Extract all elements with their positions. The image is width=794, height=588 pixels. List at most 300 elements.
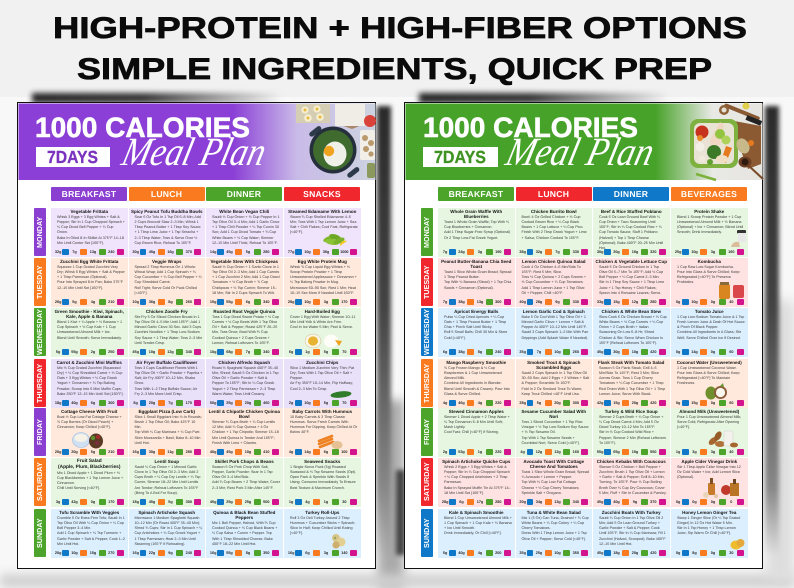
meal: Whole Grain Waffle With Blueberries: Add 1 Tbsp Sugar-Free Syrup (Optional) Or 2 Tbsp Low-Fat Greek Yogurt. xyxy=(444,230,510,240)
title: SIMPLE INGREDIENTS, QUICK PREP xyxy=(77,53,712,86)
meal: Skillet Pork Chops & Beans: Add ¾ Cup Beans + 2 Tbsp Water; Cover 2–3 Min; Rest Pork 3 Min After 145°F. xyxy=(212,480,280,490)
meal: Kombucha: 1 Cup Raw Low-Sugar Kombucha. xyxy=(677,265,734,269)
meal: Roasted Root Veggie Quinoa: Toss 1 Cup Diced Sweet Potato + ½ Cup Carrots + ½ Cup Beets With 1 Tsp Olive Oil + Salt & Pepper; Roast 425°F 20–25 Min, Toss Once; Bowl With ⅔ Cup Cooked Quinoa + 2 Cups Greens + Lemon; Reheat Leftovers To 165°F. xyxy=(212,315,279,345)
meal: Tomato Juice: 14g xyxy=(691,350,698,354)
meal: Hard-Boiled Egg: Cover 1 Egg With Water; Simmer 10–11 Min Until Yolk & White Are Firm. xyxy=(290,315,355,324)
meal: Vegetable Stew With Chickpeas: Vegetable Stew With Chickpeas xyxy=(210,259,278,264)
meal: Steamed Edamame With Lemon: 77g xyxy=(288,250,294,254)
meal: Hard-Boiled Egg: 1g xyxy=(305,350,310,354)
meal: Sesame Cucumber Salad With Nori: Top With 1 Tsp Sesame Seeds + Crumbled Nori; Serve Cold [<40°F]. xyxy=(522,436,580,445)
meal: Egg White Protein Mug: Egg White Protein Mug xyxy=(298,259,347,264)
meal: Steamed Edamame With Lemon: Steam ¾ Cup Shelled Edamame 4–5 Min; Toss With 1 Tsp Lemon Juice + Sea Salt + Chili Flakes; Cool Fast; Refrigerate [<40°F]. xyxy=(290,215,358,234)
meal: Turkey Roll-Ups: 6g xyxy=(305,551,310,555)
meal: Chicken Burrito Bowl: Bowl: 4 Oz Grilled Chicken + ½ Cup Cooked Brown Rice + ¼ Cup Black Beans + 1 Cup Lettuce + ¼ Cup Pico. xyxy=(522,215,583,229)
meal: Zucchini Chips xyxy=(284,359,360,408)
meal: Stewed Cinnamon Apples: 53g xyxy=(458,450,465,454)
meal: Tofu Scramble With Veggies: 20g xyxy=(55,551,61,555)
day tab: friday xyxy=(34,408,46,456)
meal: Stewed Cinnamon Apples: 2g xyxy=(443,450,447,454)
meal: Flank Steak With Tomato Salad: 42g xyxy=(597,401,603,405)
meal: Zucchini Boats With Turkey: Zucchini Boats With Turkey xyxy=(602,510,661,515)
meal: Turkey & Wild Rice Soup: Stir In ½ Cup Cooked Wild Rice + Pepper; Simmer 2 Min (Reheat Leftovers To 165°F). xyxy=(599,430,666,445)
meal: White Bean Vegan Chili: 280 xyxy=(263,250,269,254)
column header: beverages xyxy=(671,187,747,201)
meal: Zucchini Chips: Air Fry 350°F 10–14 Min, Flip Halfway; Cool 2–3 Min To Crisp. xyxy=(290,381,353,391)
meal: Smoked Trout & Spinach Scrambled Eggs: Sauté 2 Cups Spinach In 1 Tsp Olive Oil 30–60 Sec; Add 2 Eggs + 2 Whites + Salt & Pepper; Scramble To 160°F. xyxy=(522,371,589,385)
meal: Fruit Salad: Fruit Salad xyxy=(77,459,102,464)
meal: Lentil Soup: 5g xyxy=(168,500,173,504)
day tab: saturday: SATURDAY xyxy=(35,463,44,501)
meal: Sesame Cucumber Salad With Nori xyxy=(516,408,592,457)
meal: Egg White Protein Mug: Whisk ¾ Cup Liquid Egg Whites + ½ Scoop Protein Powder + 1 Tbsp Unsweetened Applesauce + Cinnamon + ¼ Tsp Baking Powder In Mug. xyxy=(290,265,357,284)
meal: Chicken & Vegetable Lettuce Cup: 15g xyxy=(613,300,620,304)
meal: Lemon Chicken Quinoa Salad: 330 xyxy=(573,300,579,304)
meal: Zucchini Boats With Turkey xyxy=(593,509,670,558)
meal: Beef & Rice Stuffed Poblano: 16g xyxy=(632,250,638,254)
meal: Zucchini Egg White Frittata: 26g xyxy=(55,300,61,304)
column header: lunch xyxy=(128,187,204,201)
meal: Lemon Garlic Cod & Spinach xyxy=(516,308,592,357)
meal: Carrot & Zucchini Mini Muffins: 6g xyxy=(91,401,95,405)
meal: Chicken Alfredo Squash: Chicken Alfredo Squash xyxy=(218,360,270,365)
meal: Vegetable Stew With Chickpeas: 6g xyxy=(246,300,250,304)
meal: Apricot Energy Balls: Roll 5 Small Balls; Chill 30 Min & Store Cold [<40°F]. xyxy=(444,330,507,340)
meal: Peanut Butter-Banana Chia Seed Toast: 13g xyxy=(477,300,483,304)
meal: Apple Cider Vinegar Drink: 0g xyxy=(676,500,680,504)
day tab: friday: FRIDAY xyxy=(35,419,44,445)
meal: Air Fryer Buffalo Cauliflower: 8g xyxy=(133,401,138,405)
meal: Whole Grain Waffle With Blueberries: 3g xyxy=(478,250,482,254)
meal: Apricot Energy Balls: 8g xyxy=(478,350,482,354)
day tab: saturday xyxy=(421,458,433,506)
meal: Lentil & Chipotle Chicken Quinoa Bowl: Simmer ¾ Cups Broth + ¼ Cup Lentils 12 Min; Add ¼ Cup Quinoa + 4 Oz Chicken + 1 Tsp Chipotle; Simmer 15–18 Min Until Quinoa Is Tender And 165°F; Finish With Lime + Cilantro. xyxy=(212,420,279,445)
meal: Apple Cider Vinegar Drink: Stir 1 Tbsp Apple Cider Vinegar Into 12 Oz Cold Water + Ice; Add Lemon Slice (Optional). xyxy=(677,465,741,479)
meal: Tomato Juice: Combine All Ingredients In A Glass; Stir Well; Serve Chilled Over Ice If Desired. xyxy=(677,330,741,340)
meal: Sesame Cucumber Salad With Nori: 12g xyxy=(554,450,561,454)
badge: 7 days: 7DAYS xyxy=(434,147,486,167)
icon: carrots and hummus xyxy=(318,434,342,449)
meal: Apricot Energy Balls: 240 xyxy=(495,350,501,354)
meal: Spinach Artichoke Quiche Cups xyxy=(438,458,514,507)
header banner: purple xyxy=(18,104,376,180)
meal: Lentil Soup: 300 xyxy=(186,500,192,504)
meal: Zucchini Egg White Frittata: 4g xyxy=(91,300,95,304)
meal: Almond Milk: 1g xyxy=(676,450,680,454)
meal: Honey Lemon Ginger Tea: 0g xyxy=(711,551,715,555)
meal: Smoked Trout & Spinach Scrambled Eggs: 5g xyxy=(537,401,541,405)
meal: Seaweed Snacks xyxy=(284,458,360,507)
day tab: sunday: SUNDAY xyxy=(422,518,431,548)
meal: Beef & Rice Stuffed Poblano: 30g xyxy=(597,250,603,254)
icon: ginger snack xyxy=(332,534,346,549)
meal: Lemon Chicken Quinoa Salad: Toss ½ Cup Quinoa + 2 Cups Greens + ½ Cup Cucumber + ¼ Cup Tomatoes; Add 1 Tbsp Lemon Juice + 1 Tsp Olive Oil + Pepper; Chill <40°F. xyxy=(522,275,586,295)
meal: Spinach Artichoke Squash xyxy=(128,509,205,558)
meal: Turkey Roll-Ups: 3g xyxy=(324,551,328,555)
meal: Chicken & Vegetable Lettuce Cup: 33g xyxy=(597,300,603,304)
column header: dinner xyxy=(593,187,669,201)
meal: Turkey & Wild Rice Soup: 15g xyxy=(632,450,638,454)
meal: Vegetable Frittata xyxy=(51,208,128,257)
meal: Coconut Water: 15g xyxy=(691,401,698,405)
meal: Turkey & Wild Rice Soup: 65g xyxy=(613,450,620,454)
meal: Chicken Burrito Bowl: 38g xyxy=(519,250,526,254)
meal: Tofu Scramble With Veggies: Add 1 Cup Spinach + ¼ Tsp Turmeric + Garlic Powder + Salt & Pepper; Cook 1–2 Min Until Hot. xyxy=(57,531,125,546)
meal: Spinach Artichoke Quiche Cups: 17g xyxy=(477,500,483,504)
meal: Tofu Scramble With Veggies xyxy=(51,509,128,558)
meal: Chicken Alfredo Squash: 460 xyxy=(263,401,269,405)
meal: Skillet Pork Chops & Beans: Season 5 Oz Pork Chop With Salt, Pepper, Garlic Powder; Sear In 1 Tsp Olive Oil 3–4 Min/Side. xyxy=(212,465,273,479)
meal: Chicken & Vegetable Lettuce Cup: Sauté 5 Oz Ground Chicken In 1 Tsp Olive Oil 5–7 Min To 165°F; Add ½ Cup Bell Pepper + ¼ Cup Carrot 2–3 Min. xyxy=(599,265,663,279)
meal: Veggie Wraps: 36g xyxy=(149,300,155,304)
meal: Kale & Spinach Smoothie: Blend 1 Cup Unsweetened Almond Milk + 1 Cup Spinach + 1 Cup Kale + ½ Banana + Ice Until Smooth. xyxy=(444,516,512,530)
meal: Air Fryer Buffalo Cauliflower: 170 xyxy=(186,401,192,405)
meal: Lemon Chicken Quinoa Salad: 28g xyxy=(536,300,542,304)
meal: Tuna & White Bean Salad: 35g xyxy=(519,551,526,555)
meal: Cottage Cheese With Fruit: 210 xyxy=(108,450,114,454)
meal: Kale & Spinach Smoothie: 40g xyxy=(458,551,465,555)
meal: Smoked Trout & Spinach Scrambled Eggs: Smoked Trout & Spinach Scrambled Eggs xyxy=(527,360,580,370)
meal: Apricot Energy Balls: Apricot Energy Balls xyxy=(454,309,498,314)
meal: Beef & Rice Stuffed Poblano: 320 xyxy=(650,250,656,254)
meal: Lentil Soup: 45g xyxy=(149,500,155,504)
meal: Chicken & White Bean Stew: 10g xyxy=(632,350,638,354)
meal: Vegetable Frittata: 13g xyxy=(90,250,96,254)
header banner: green xyxy=(406,102,764,182)
meal: Apple Cider Vinegar Drink: 0g xyxy=(692,500,697,504)
meal: Tomato Juice xyxy=(671,308,748,357)
meal: Kombucha: 0g xyxy=(676,300,680,304)
meal: Turkey & Wild Rice Soup: Turkey & Wild Rice Soup xyxy=(605,409,658,414)
meal: Seaweed Snacks: 4g xyxy=(305,500,310,504)
meal: Baby Carrots With Hummus: 10 Baby Carrots & 3 Tbsp Classic Hummus. Serve Fresh Carrots With Hummus For Dipping. Keep Chilled At Or Below 40°F. xyxy=(290,415,357,434)
meal: Avocado Toast With Cottage Cheese And Tomatoes: 20g xyxy=(519,500,526,504)
meal: Almond Milk: 3g xyxy=(711,450,715,454)
title xyxy=(53,12,747,86)
meal: Avocado Toast With Cottage Cheese And Tomatoes: 13g xyxy=(554,500,561,504)
day tab: sunday xyxy=(34,509,46,557)
meal: Tuna & White Bean Salad: Tuna & White Bean Salad xyxy=(527,510,581,515)
meal: Honey Lemon Ginger Tea: 8g xyxy=(692,551,697,555)
meal: Lemon Garlic Cod & Spinach: Bake 5 Oz Cod With 1 Tsp Olive Oil + 1 Minced Garlic Clove + Lemon + Salt & Pepper At 400°F 10–12 Min Until 145°F. xyxy=(522,315,587,329)
meal: Hard-Boiled Egg: 5g xyxy=(324,350,328,354)
meal: Beef & Rice Stuffed Poblano: Beef & Rice Stuffed Poblano xyxy=(601,209,662,214)
meal: Eggplant Pizza: 280 xyxy=(186,450,192,454)
meal: Cottage Cheese With Fruit: Boat ½ Cup Low-Fat Cottage Cheese + ¾ Cup Berries (Or Diced Peach) + Cinnamon; Keep Chilled [<40°F]. xyxy=(57,415,122,429)
meal: Honey Lemon Ginger Tea: Stir In 1 Tsp Honey + 1 Tbsp Lemon Juice; Sip Warm Or Chill [<40°F]. xyxy=(677,526,736,535)
meal: Kombucha: 10g xyxy=(691,300,698,304)
meal: Spinach Artichoke Quiche Cups: Bake In Sprayed Muffin Tin At 375°F 14–18 Min Until Set [160°F]. xyxy=(444,486,511,495)
meal: Vegetable Frittata: Bake In Oiled 8-In Skillet At 375°F 14–18 Min Until Center Set [160°F]. xyxy=(57,236,124,245)
meal: Avocado Toast With Cottage Cheese And Tomatoes xyxy=(516,458,592,507)
meal: Lemon Garlic Cod & Spinach: Sauté 3 Cups Spinach 1–2 Min With Pan Drippings (Add Splash Water If Needed). xyxy=(522,330,588,340)
meal: Whole Grain Waffle With Blueberries: Toast 1 Whole Grain Waffle; Top With ¼ Cup Blueberries + Cinnamon. xyxy=(444,220,509,229)
meal: Spinach Artichoke Squash: 240 xyxy=(186,551,192,555)
meal: Lemon Chicken Quinoa Salad: 40g xyxy=(519,300,526,304)
meal: Veggie Wraps: 260 xyxy=(186,300,192,304)
meal: Avocado Toast With Cottage Cheese And Tomatoes: 340 xyxy=(573,500,579,504)
meal: Almond Milk: 3g xyxy=(692,450,697,454)
meal: Green Smoothie xyxy=(51,308,128,357)
panel: green poster with beverages xyxy=(404,102,764,569)
meal: Steamed Edamame With Lemon: Steamed Edamame With Lemon xyxy=(288,209,356,214)
meal: Seaweed Snacks: Open Pack & Sprinkle With Seeds If Using; Consume Immediately To Ensure Best Texture & Maximum Crunch. xyxy=(290,475,356,490)
meal: Coconut Water: 60 xyxy=(729,401,733,405)
meal: Coconut Water: Pour Into Glass & Serve Chilled; Keep Refrigerated [<40°F] To Maintain Freshness. xyxy=(677,371,740,385)
meal: Spinach Artichoke Quiche Cups: 28g xyxy=(442,500,448,504)
meal: Chicken Alfredo Squash: 20g xyxy=(245,401,251,405)
meal: Kale & Spinach Smoothie: Drink Immediately, Or Chill [<40°F]. xyxy=(444,531,502,535)
column header: beverages: BEVERAGES xyxy=(681,189,737,199)
meal: Fruit Salad: Mix 1 Diced Apple + 1 Diced Plum + ½ Cup Blackberries + 1 Tsp Lemon Juice + Cinnamon. xyxy=(57,471,123,485)
meal: White Bean Vegan Chili: White Bean Vegan Chili xyxy=(219,209,269,214)
meal: Tomato Juice: 0g xyxy=(676,350,680,354)
day tab: monday: MONDAY xyxy=(35,216,44,248)
meal: Veggie Wraps: Spread 2 Tbsp Hummus On 1 Whole-Wheat Wrap; Add 1 Cup Spinach + ¼ Cup Cucumber + ¼ Cup Bell Pepper + ¼ Cup Shredded Carrot. xyxy=(134,265,202,284)
meal: Stewed Cinnamon Apples: 220 xyxy=(495,450,501,454)
heading: 1000 calories: 1000 CALORIES xyxy=(35,112,250,143)
meal: Lemon Chicken Quinoa Salad: 9g xyxy=(555,300,560,304)
meal: Zucchini Boats With Turkey: 420 xyxy=(650,551,656,555)
meal: Green Smoothie: 5g xyxy=(56,350,60,354)
column header: breakfast: BREAKFAST xyxy=(449,189,503,199)
meal: Vegetable Frittata: Vegetable Frittata xyxy=(70,209,108,214)
meal: Lentil & Chipotle Chicken Quinoa Bowl xyxy=(206,408,282,457)
meal: Protein Shake: 25g xyxy=(675,250,681,254)
meal: Fruit Salad: 170 xyxy=(108,500,114,504)
meal: Quinoa & Black Bean Stuffed Peppers: Quinoa & Black Bean Stuffed Peppers xyxy=(213,510,275,520)
meal: Turkey Roll-Ups: Turkey Roll-Ups xyxy=(305,510,339,515)
meal: Vegetable Frittata: 7g xyxy=(72,250,77,254)
meal: Green Smoothie: Blend Until Smooth; Serve Immediately. xyxy=(57,336,122,340)
meal: Smoked Trout & Spinach Scrambled Eggs: 28g xyxy=(519,401,526,405)
meal: Mango Raspberry Smoothie: 220 xyxy=(495,401,501,405)
day tab: thursday: THURSDAY xyxy=(35,363,44,403)
meal: White Bean Vegan Chili xyxy=(206,208,282,257)
meal: Green Smoothie: 55g xyxy=(71,350,78,354)
meal: Peanut Butter-Banana Chia Seed Toast: Peanut Butter-Banana Chia Seed Toast xyxy=(441,259,511,269)
meal: Vegetable Stew With Chickpeas: 55g xyxy=(226,300,233,304)
meal: Vegetable Frittata: Whisk 3 Eggs + 3 Egg Whites + Salt & Pepper; Stir In 1 Cup Chopped Spinach + ¼ Cup Diced Bell Pepper + ¼ Cup Onion. xyxy=(57,215,125,234)
icon: bowl and berries xyxy=(72,432,103,448)
meal: Zucchini Boats With Turkey: 20g xyxy=(632,551,638,555)
meal: Zucchini Boats With Turkey: Sauté ¼ Cup Onion In 1 Tsp Olive Oil 2 Min; Add 5 Oz Lean Ground Turkey + Garlic Powder + Salt & Pepper; Cook Until 165°F. Stir In ¼ Cup Marinara; Fill 1 Zucchini (Halved, Scooped); Bake 400°F 12–15 Min Until Hot. xyxy=(599,516,666,546)
meal: Whole Grain Waffle With Blueberries: 190 xyxy=(495,250,501,254)
meal: Coconut Water xyxy=(671,359,748,408)
meal: Chicken Zoodle Fry: 45g xyxy=(132,350,139,354)
day tab: tuesday: TUESDAY xyxy=(422,265,431,299)
meal: Tomato Juice: Tomato Juice xyxy=(695,309,724,314)
meal: Quinoa & Black Bean Stuffed Peppers: Mix 1 Bell Pepper, Halved, With ⅔ Cup Cooked Quinoa + ½ Cup Black Beans + ¼ Cup Salsa + Cumin + Pepper. Top With 1 Tbsp Shredded Cheese; Bake 400°F 18–22 Min Until Hot. xyxy=(212,521,277,546)
meal: Zucchini Egg White Frittata: Pour Into Sprayed 8-In Pan; Bake 375°F 12–15 Min Until Set [160°F]. xyxy=(57,280,123,290)
meal: Honey Lemon Ginger Tea: Steep 1 Ginger Slice (Or ¼ Tsp Grated Ginger) In 12 Oz Hot Water 5 Min. xyxy=(677,516,740,525)
meal: Kombucha: Pour Into Glass & Serve Chilled; Keep Refrigerated [<40°F] To Preserve Probiotics. xyxy=(677,270,740,284)
meal: Carrot & Zucchini Mini Muffins: 40g xyxy=(71,401,78,405)
meal: Avocado Toast With Cottage Cheese And Tomatoes: 34g xyxy=(536,500,542,504)
meal: Spinach Artichoke Quiche Cups: Spinach Artichoke Quiche Cups xyxy=(442,459,510,464)
meal: Chicken Zoodle Fry xyxy=(128,308,205,357)
meal: Lentil & Chipotle Chicken Quinoa Bowl: 45g xyxy=(226,450,233,454)
meal: Apple Cider Vinegar Drink xyxy=(671,458,748,507)
meal: Honey Lemon Ginger Tea: 0g xyxy=(676,551,680,555)
meal: Apricot Energy Balls: 38g xyxy=(458,350,465,354)
meal: Protein Shake: Protein Shake xyxy=(694,209,724,214)
meal: Veggie Wraps: 10g xyxy=(132,300,139,304)
column header: dinner: DINNER xyxy=(614,189,648,199)
meal: Roasted Root Veggie Quinoa: 10g xyxy=(210,350,216,354)
meal: Tuna & White Bean Salad: 350 xyxy=(573,551,579,555)
meal: Egg White Protein Mug: 28g xyxy=(288,300,294,304)
day tab: friday: FRIDAY xyxy=(422,419,431,445)
meal: Protein Shake xyxy=(671,208,748,257)
meal: Almond Milk: Pour 1 Cup Unsweetened Almond Milk; Serve Cold; Refrigerate After Opening [<40°F]. xyxy=(677,415,741,429)
meal: Chicken Zoodle Fry: 12g xyxy=(167,350,174,354)
meal: Seaweed Snacks: Seaweed Snacks xyxy=(304,459,340,464)
day tab: thursday xyxy=(421,359,433,407)
meal: Chicken & White Bean Stew xyxy=(593,308,670,357)
meal: Quinoa & Black Bean Stuffed Peppers: 55g xyxy=(226,551,233,555)
meal: Roasted Root Veggie Quinoa: 340 xyxy=(263,350,269,354)
icon: zucchini xyxy=(330,391,352,398)
meal: Zucchini Egg White Frittata: 210 xyxy=(108,300,114,304)
day tab: monday: MONDAY xyxy=(422,216,431,248)
meal: White Bean Vegan Chili: 45g xyxy=(226,250,233,254)
meal: Carrot & Zucchini Mini Muffins: 18g xyxy=(55,401,61,405)
meal: Lentil Soup: Lentil Soup xyxy=(154,459,179,464)
meal: Tomato Juice: 60 xyxy=(729,350,733,354)
meal: Lemon Chicken Quinoa Salad: Cook 4 Oz Chicken 4–6 Min/Side To 165°F; Rest 5 Min; Slice. xyxy=(522,265,581,274)
meal: Vegetable Stew With Chickpeas: Sauté ½ Cup Onion + 1 Garlic Clove In 1 Tsp Olive Oil 2–3 Min; Add 1 Cup Carrots + 1 Cup Zucchini 2 Min; Add 1 Cup Diced Tomatoes + ½ Cup Broth + ¾ Cup Chickpeas + ½ Tsp Cumin; Simmer 15–18 Min; Stir In 2 Cups Spinach To Wilt. xyxy=(212,265,280,295)
meal: Chicken Zoodle Fry: Chicken Zoodle Fry xyxy=(146,309,188,314)
column header: snacks: SNACKS xyxy=(303,189,341,199)
meal: Apricot Energy Balls xyxy=(438,308,514,357)
meal: Peanut Butter-Banana Chia Seed Toast: Toast 1 Slice Whole-Grain Bread; Spread 1 Tbsp Peanut Butter. xyxy=(444,270,511,279)
meal: Carrot & Zucchini Mini Muffins xyxy=(51,359,128,408)
meal: Tofu Scramble With Veggies: Tofu Scramble With Veggies xyxy=(59,510,119,515)
meal: Egg White Protein Mug: 10g xyxy=(304,300,311,304)
meal: Eggplant Pizza: 30g xyxy=(149,450,155,454)
day tab: sunday xyxy=(421,509,433,557)
meal: Chicken Kebabs With Couscous: Chicken Kebabs With Couscous xyxy=(597,459,666,464)
meal: Stewed Cinnamon Apples: 1g xyxy=(478,450,482,454)
meal: Apricot Energy Balls: 6g xyxy=(443,350,447,354)
meal: Beef & Rice Stuffed Poblano: Cook 6 Oz Lean Ground Beef With ¼ Cup Onion + Taco Seasoning Until 160°F; Stir In ¼ Cup Cooked Rice + ¼ Cup Tomato Sauce; Stuff 1 Poblano (Halved) + Top 1 Tbsp Cheese (Optional); Bake 400°F 20–25 Min Until Hot. xyxy=(599,215,663,250)
meal: Carrot & Zucchini Mini Muffins: 300 xyxy=(108,401,114,405)
column header: breakfast xyxy=(438,187,514,201)
meal: Hard-Boiled Egg: 70 xyxy=(342,350,346,354)
meal: Skillet Pork Chops & Beans: Skillet Pork Chops & Beans xyxy=(215,459,274,464)
meal: Chicken & White Bean Stew: 30g xyxy=(613,350,620,354)
meal: Smoked Trout & Spinach Scrambled Eggs: 300 xyxy=(573,401,579,405)
meal: Smoked Trout & Spinach Scrambled Eggs: Fold In 2 Oz Smoked Trout To Warm; Keep Trout Chilled <40°F Until Use. xyxy=(522,387,582,396)
meal: Tofu Scramble With Veggies: 10g xyxy=(71,551,78,555)
meal: Peanut Butter-Banana Chia Seed Toast: 38g xyxy=(458,300,465,304)
meal: Apple Cider Vinegar Drink: 0g xyxy=(711,500,715,504)
meal: Air Fryer Buffalo Cauliflower: Toss 3 Cups Cauliflower Florets With 1 Tsp Olive Oil + Garlic Powder + Paprika + Salt; Air Fry 400°F 10–12 Min, Shake Once. xyxy=(134,366,202,385)
meal: Turkey & Wild Rice Soup: 55g xyxy=(597,450,603,454)
meal: Chicken Burrito Bowl: 7g xyxy=(555,250,560,254)
heading: 1000 calories: 1000 CALORIES xyxy=(423,112,638,143)
column header: breakfast: BREAKFAST xyxy=(62,189,116,199)
meal: Spicy Peanut Tofu Buddha Bowls: Spicy Peanut Tofu Buddha Bowls xyxy=(131,209,202,214)
meal: Chicken & Vegetable Lettuce Cup: Chicken & Vegetable Lettuce Cup xyxy=(595,259,667,264)
meal: Chicken & Vegetable Lettuce Cup: 280 xyxy=(650,300,656,304)
meal: Lemon Garlic Cod & Spinach: 260 xyxy=(573,350,579,354)
meal: Roasted Root Veggie Quinoa: 7g xyxy=(246,350,250,354)
meal: Kombucha: Kombucha xyxy=(698,259,721,264)
meal: Fruit Salad: 0g xyxy=(91,500,95,504)
meal: Coconut Water: 1 Cup Unsweetened Coconut Water. xyxy=(677,366,737,370)
meal: Lemon Garlic Cod & Spinach: 10g xyxy=(554,350,561,354)
meal: Roasted Root Veggie Quinoa: 68g xyxy=(226,350,233,354)
meal: Smoked Trout & Spinach Scrambled Eggs xyxy=(516,359,592,408)
meal: Peanut Butter-Banana Chia Seed Toast xyxy=(438,258,514,307)
meal: Vegetable Stew With Chickpeas: 340 xyxy=(263,300,269,304)
meal: Seaweed Snacks: 1g xyxy=(289,500,293,504)
meal: Zucchini Egg White Frittata: Zucchini Egg White Frittata xyxy=(60,259,118,264)
meal: Chicken & White Bean Stew: Slow-Cook 6 Oz Chicken Breast + ½ Cup White Beans + ½ Cup Carrots + ¼ Cup Onion + 2 Cups Broth + Italian Seasoning On Low 6–8 Hr; Shred Chicken & Stir; Serve When Chicken Is 165°F (Reheat Leftovers To 165°F). xyxy=(599,315,667,345)
meal: Fruit Salad: (Apple, Plum, Blackberries) xyxy=(58,465,120,470)
meal: Apple Cider Vinegar Drink: 0 xyxy=(730,500,732,504)
day tab: wednesday: WEDNESDAY xyxy=(422,309,431,355)
meal: Sesame Cucumber Salad With Nori: 12g xyxy=(536,450,542,454)
meal: Vegetable Frittata: 240 xyxy=(108,250,114,254)
day tab: tuesday: TUESDAY xyxy=(35,265,44,299)
day tab: thursday: THURSDAY xyxy=(422,363,431,403)
meal: White Bean Vegan Chili: 14g xyxy=(210,250,216,254)
meal: Tuna & White Bean Salad: Dress With 1 Tbsp Lemon Juice + 1 Tsp Olive Oil + Pepper; Serve Cold [<40°F]. xyxy=(522,531,587,541)
meal: Stewed Cinnamon Apples: Stewed Cinnamon Apples xyxy=(449,409,504,414)
meal: Beef & Rice Stuffed Poblano: 20g xyxy=(613,250,620,254)
meal: Zucchini Egg White Frittata: 5g xyxy=(72,300,77,304)
column header: dinner xyxy=(206,187,282,201)
meal: Spicy Peanut Tofu Buddha Bowls: 370 xyxy=(186,250,192,254)
meal: Chicken Burrito Bowl: Chicken Burrito Bowl xyxy=(531,209,577,214)
meal: Eggplant Pizza: Top With ¼ Cup Marinara + ¼ Cup Part-Skim Mozzarella + Basil; Bake 8–10 Min Until Hot. xyxy=(134,430,200,445)
meal: Egg White Protein Mug xyxy=(284,258,360,307)
meal: Eggplant Pizza: 16g xyxy=(132,450,139,454)
meal: Veggie Wraps xyxy=(128,258,205,307)
meal: Mango Raspberry Smoothie: 4g xyxy=(443,401,447,405)
meal: Hard-Boiled Egg xyxy=(284,308,360,357)
meal: Spicy Peanut Tofu Buddha Bowls xyxy=(128,208,205,257)
icon: coconut xyxy=(706,383,727,400)
meal: Skillet Pork Chops & Beans: 45g xyxy=(210,500,216,504)
meal: Apple Cider Vinegar Drink: Apple Cider Vinegar Drink xyxy=(681,459,737,464)
heading: meal plan script: Meal Plan xyxy=(117,129,271,174)
meal: Kale & Spinach Smoothie: Kale & Spinach Smoothie xyxy=(449,510,504,515)
meal: Peanut Butter-Banana Chia Seed Toast: 7g xyxy=(443,300,447,304)
meal: Quinoa & Black Bean Stuffed Peppers: 350 xyxy=(263,551,269,555)
meal: Chicken & White Bean Stew: 420 xyxy=(650,350,656,354)
meal: Lentil Soup xyxy=(128,458,205,507)
meal: Spicy Peanut Tofu Buddha Bowls: 30g xyxy=(132,250,139,254)
meal: Lentil & Chipotle Chicken Quinoa Bowl: Lentil & Chipotle Chicken Quinoa Bowl xyxy=(209,409,280,419)
meal: Skillet Pork Chops & Beans: 25g xyxy=(226,500,233,504)
meal: Spicy Peanut Tofu Buddha Bowls: Sear 6 Oz Tofu In 1 Tsp Oil 6–8 Min; Add 2 Cups Broccoli Slaw 2–3 Min; Whisk 1 Tbsp Peanut Butter + 1 Tbsp Soy Sauce + 1 Tbsp Lime Juice + 1 Tsp Sriracha + 2–3 Tbsp Water; Toss & Serve Over ½ Cup Brown Rice; Reheat To 165°F. xyxy=(134,215,201,245)
meal: Spinach Artichoke Squash: 9g xyxy=(168,551,173,555)
meal: Whole Grain Waffle With Blueberries xyxy=(438,208,514,257)
meal: Tuna & White Bean Salad: 10g xyxy=(554,551,561,555)
meal: Steamed Edamame With Lemon: 10g xyxy=(304,250,311,254)
meal: Turkey & Wild Rice Soup xyxy=(593,408,670,457)
meal: Tofu Scramble With Veggies: Crumble 6 Oz Extra-Firm Tofu; Sauté In 1 Tsp Olive Oil With ¼ Cup Onion + ¼ Cup Bell Pepper 3–4 Min. xyxy=(57,516,125,530)
meal: Protein Shake: 10g xyxy=(691,250,698,254)
meal: Mango Raspberry Smoothie: Mango Raspberry Smoothie xyxy=(446,360,506,365)
meal: Tomato Juice: 0g xyxy=(711,350,715,354)
meal: Seaweed Snacks: 30 xyxy=(342,500,346,504)
icon: protein shaker xyxy=(731,230,746,247)
meal: Lentil Soup: Sauté ¼ Cup Onion + 1 Minced Garlic Clove In 1 Tsp Olive Oil 2–3 Min; Add 2 Cups Broth + ¼ Cup Dry Lentils + ¼ Tsp Cumin; Simmer 18–22 Min Until Lentils Are Tender; Reheat Leftovers To 165°F (Bring To A Boil For Soup). xyxy=(134,465,200,495)
